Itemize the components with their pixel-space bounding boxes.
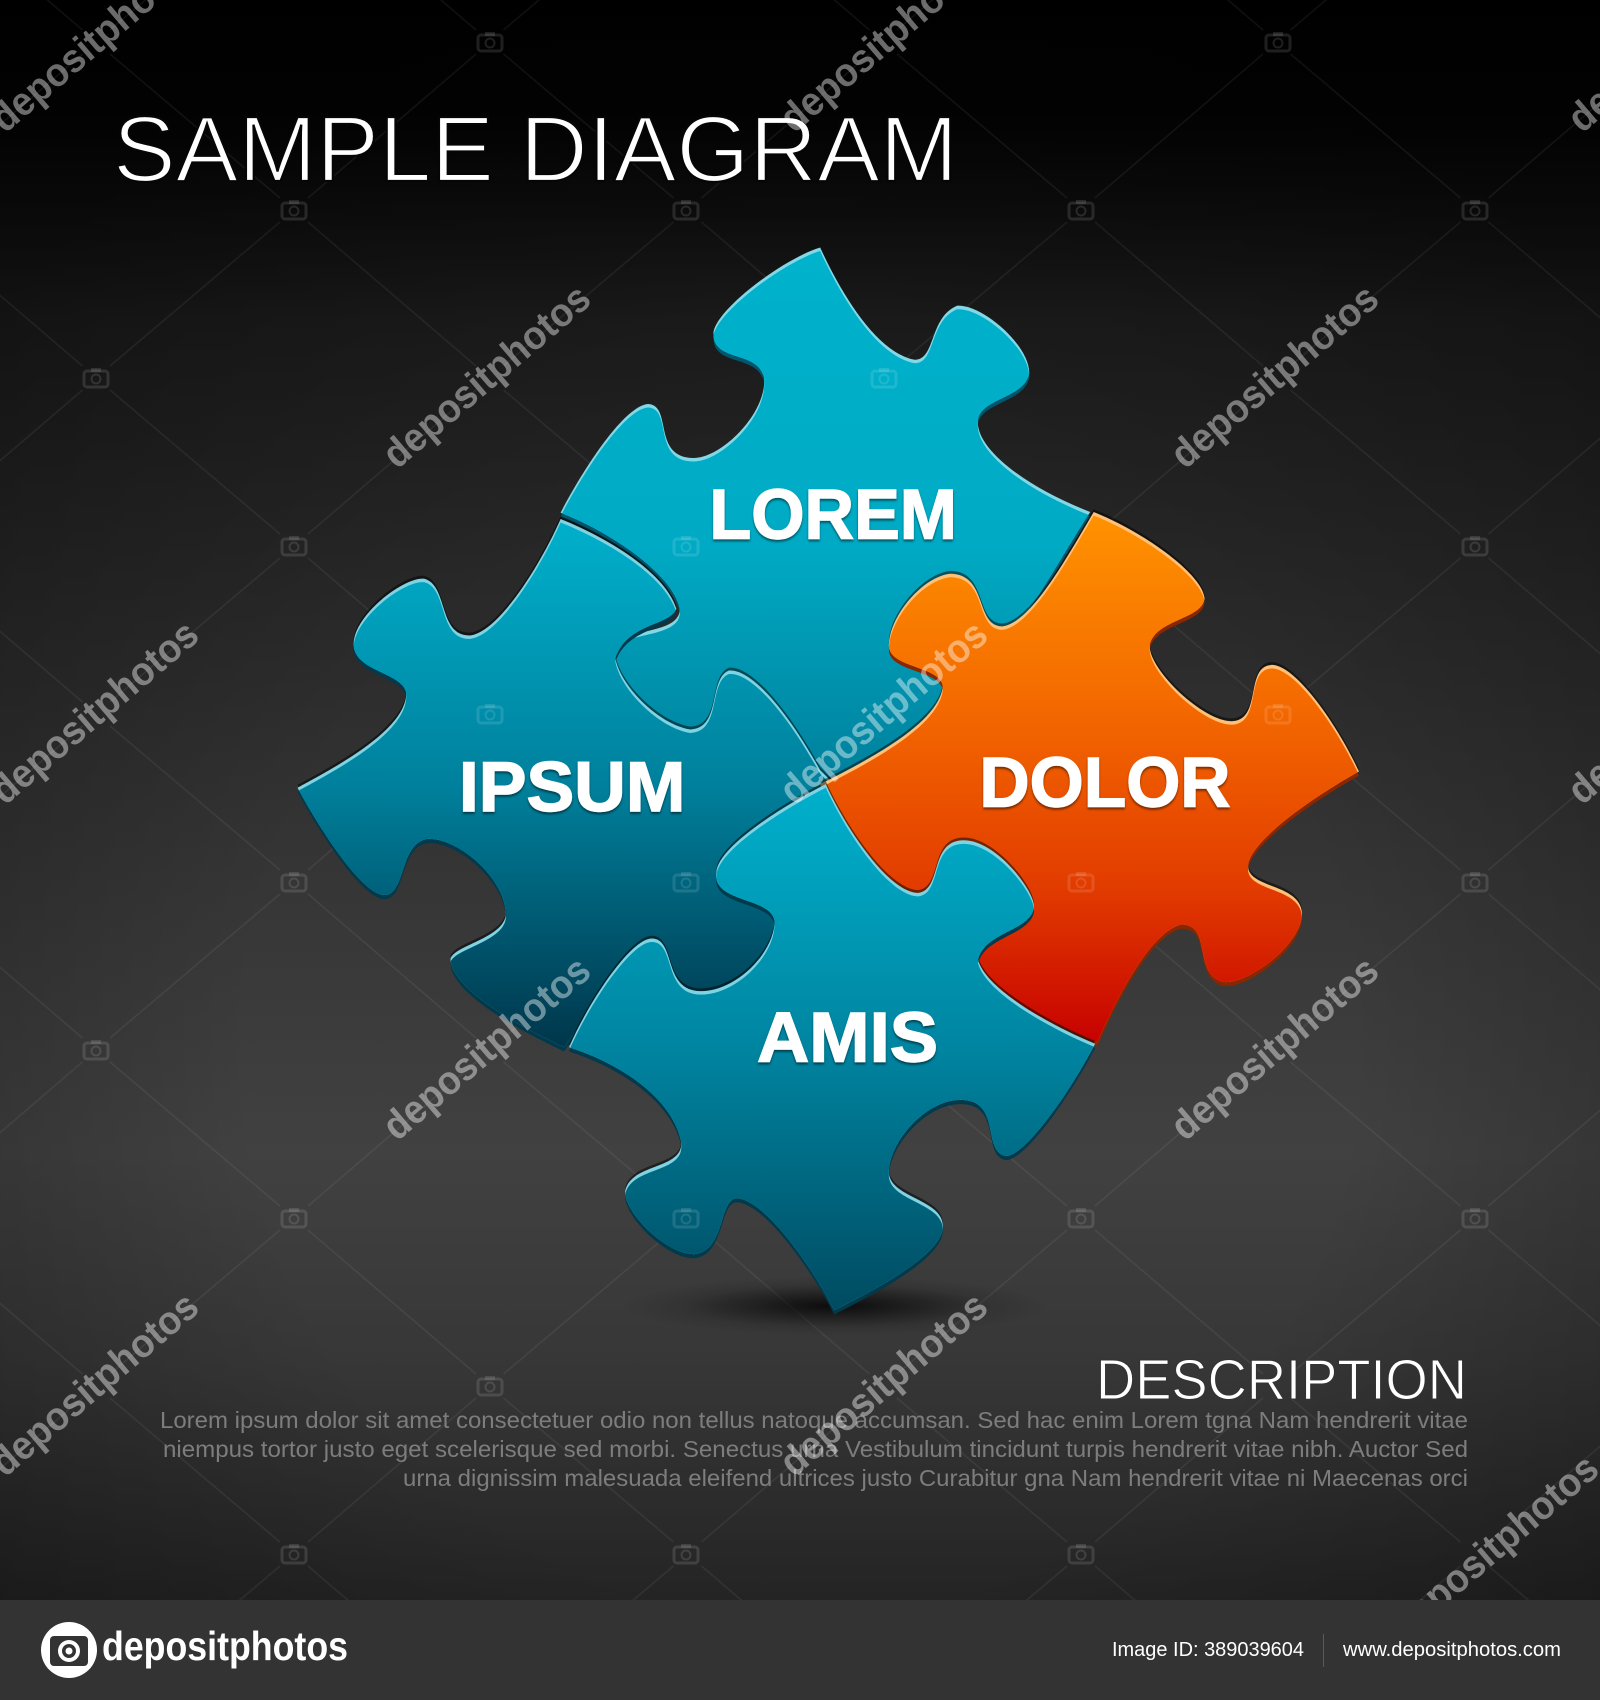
watermark camera icons <box>84 32 1487 1563</box>
description body text: urna dignissim malesuada eleifend ultrices justo Curabitur gna Nam hendrerit vitae ni Maecenas orci <box>403 1465 1468 1491</box>
footer url: www.depositphotos.com <box>1342 1639 1561 1661</box>
footer bar <box>0 1600 1600 1700</box>
watermark wordmarks: depositphotos <box>1162 276 1387 477</box>
title: SAMPLE DIAGRAM <box>113 97 958 201</box>
puzzle diagram <box>298 248 1359 1315</box>
footer image id: Image ID: 389039604 <box>1112 1639 1304 1661</box>
description heading: DESCRIPTION <box>1096 1348 1467 1412</box>
watermark wordmarks: depositphotos <box>771 1284 996 1485</box>
label: lorem: LOREM <box>709 476 957 555</box>
label: amis: AMIS <box>757 998 938 1077</box>
watermark wordmarks: depositphotos <box>374 948 599 1149</box>
description body text <box>160 1407 1468 1491</box>
piece: amis <box>569 781 1095 1315</box>
logo wordmark: depositphotos <box>102 1623 348 1669</box>
watermark wordmarks: depositphotos <box>374 276 599 477</box>
watermark wordmarks: depositphotos <box>1162 948 1387 1149</box>
watermark wordmarks: depositphotos <box>771 612 996 813</box>
piece: ipsum <box>298 516 834 1051</box>
footer logo <box>41 1622 348 1678</box>
label: ipsum: IPSUM <box>459 748 685 827</box>
description body text: niempus tortor justo eget scelerisque sed morbi. Senectus urna Vestibulum tincidunt turpis hendrerit vitae nibh. Auctor Sed <box>163 1436 1468 1462</box>
footer divider <box>1323 1634 1324 1667</box>
floor shadow <box>620 1276 1050 1336</box>
piece: dolor <box>820 509 1359 1047</box>
piece: lorem <box>561 248 1090 788</box>
label: dolor: DOLOR <box>979 744 1231 823</box>
icon: camera badge <box>41 1622 97 1678</box>
description body text: Lorem ipsum dolor sit amet consectetuer odio non tellus natoque accumsan. Sed hac enim Lorem tgna Nam hendrerit vitae <box>160 1407 1468 1433</box>
